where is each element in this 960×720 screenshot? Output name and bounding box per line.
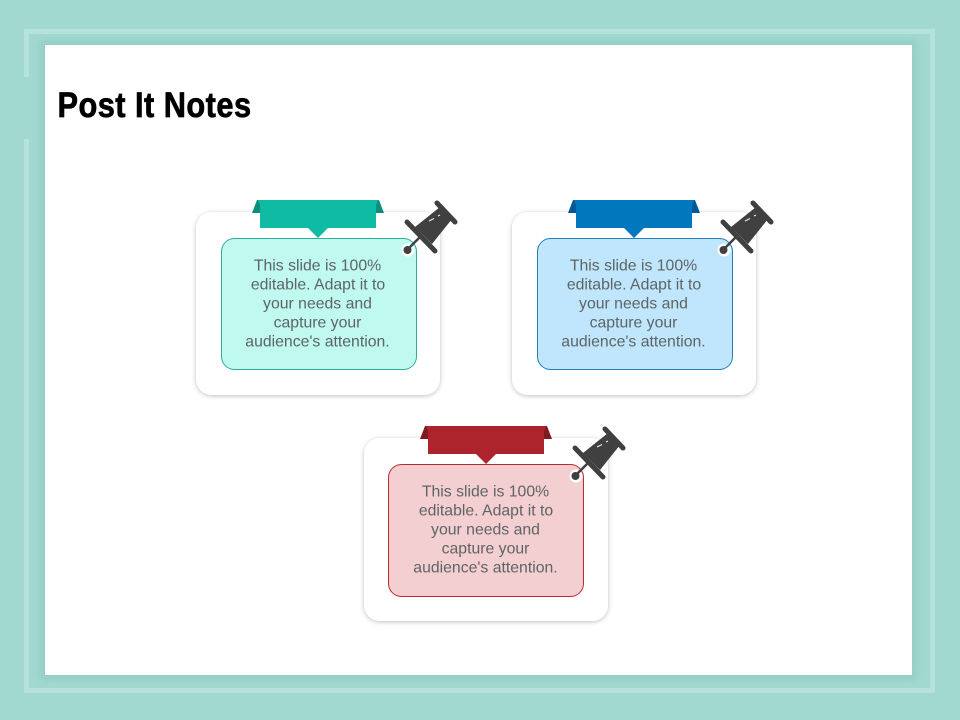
note card bbox=[512, 212, 756, 395]
icon: push pin bbox=[570, 429, 623, 482]
text block: editable. Adapt it to bbox=[419, 502, 553, 520]
banner bbox=[420, 426, 552, 464]
text block: editable. Adapt it to bbox=[251, 276, 385, 294]
text block: This slide is 100% bbox=[254, 258, 381, 274]
text block: your needs and bbox=[431, 522, 540, 538]
icon: push pin bbox=[718, 203, 771, 256]
text block: editable. Adapt it to bbox=[567, 276, 701, 294]
panel: teal note bbox=[196, 200, 455, 395]
icon: push pin bbox=[402, 203, 455, 256]
note card bbox=[196, 212, 440, 395]
panel: white slide bbox=[45, 45, 912, 675]
sticky note text box bbox=[388, 464, 584, 596]
banner bbox=[568, 200, 700, 238]
text block: capture your bbox=[590, 314, 677, 332]
text block: your needs and bbox=[263, 296, 372, 312]
title: Post It Notes bbox=[58, 85, 251, 124]
text block: This slide is 100% bbox=[570, 258, 697, 274]
text block: your needs and bbox=[579, 296, 688, 312]
sticky note text box bbox=[222, 238, 416, 370]
note card bbox=[364, 438, 608, 621]
panel: blue note bbox=[512, 200, 771, 395]
text block: audience's attention. bbox=[413, 560, 558, 576]
sticky note text box bbox=[538, 238, 732, 370]
text block: audience's attention. bbox=[561, 334, 706, 350]
text block: capture your bbox=[442, 540, 529, 558]
banner bbox=[252, 200, 384, 238]
text block: capture your bbox=[274, 314, 361, 332]
text block: audience's attention. bbox=[245, 334, 390, 350]
text block: This slide is 100% bbox=[422, 484, 549, 500]
panel: red note bbox=[364, 426, 623, 621]
